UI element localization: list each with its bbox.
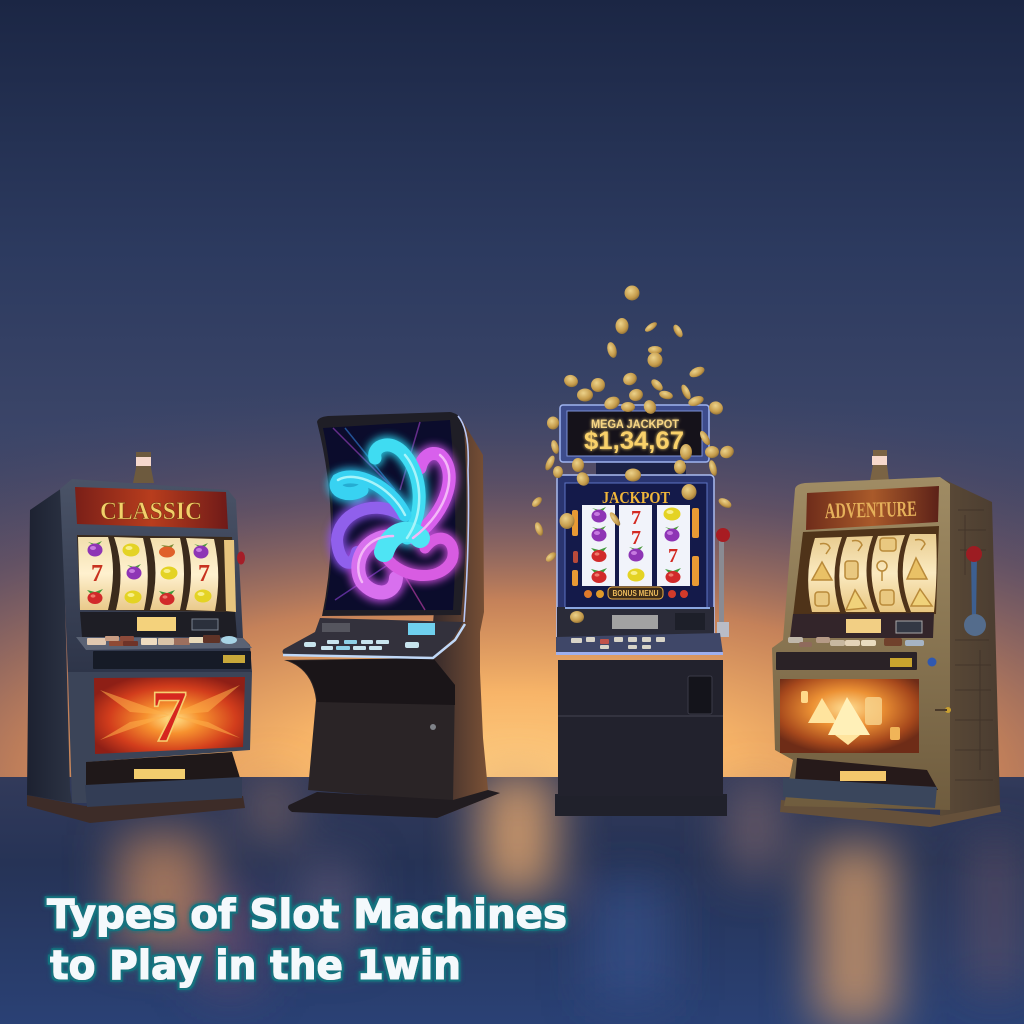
reel symbols: 7 [631,527,641,549]
lower cabinet [68,672,252,803]
payout tray [85,752,242,807]
control panel [282,618,463,657]
reels [582,505,690,586]
bright blue display [408,623,435,635]
base foot [288,790,500,818]
button deck [76,637,252,650]
marquee title: CLASSIC [100,498,202,525]
cabinet side [430,415,500,818]
upper frame [60,479,252,672]
lever [716,528,730,637]
buttons [788,637,924,647]
credit display [846,619,881,633]
reel symbols [591,507,681,583]
base [555,794,727,816]
neon edge light [458,416,468,622]
base plinth [27,795,245,823]
screen [323,420,455,610]
jackpot banner: JACKPOT [602,488,671,507]
side panel [27,488,72,803]
lower art panel [94,677,245,754]
title [47,892,567,989]
buttons [87,635,237,646]
side carvings [955,510,993,780]
base plinth [780,800,1001,827]
slot machine: video curved screen [282,412,500,818]
lower cabinet [558,660,723,796]
coin slot strip [93,651,251,669]
stand column [284,658,455,802]
reel symbols [87,541,212,605]
jackpot display [560,405,709,462]
buttons [304,640,419,650]
connector neck [596,462,686,476]
screen bezel [317,412,466,616]
marquee [75,487,228,529]
marquee [806,486,939,530]
reel window [77,535,236,612]
side symbol strips [572,508,699,586]
cabinet lock [430,724,436,730]
light bulb on top [870,450,889,481]
reel symbols: 7 [91,561,103,587]
stand upper shadow [290,658,455,705]
reel symbols: 7 [198,561,210,587]
screen rays [333,422,425,610]
door latch [935,707,951,713]
game face [565,483,707,611]
reel symbols [812,538,932,610]
reel symbols: 7 [668,545,678,567]
cash slot [688,676,712,714]
payout tray [783,758,938,808]
info panel [790,613,934,638]
credit display [137,617,176,631]
falling gold coins [530,286,736,623]
big seven: 7 [150,676,188,758]
reflective floor [0,777,1024,1024]
gold front frame [772,477,950,810]
side knob [237,552,245,564]
bonus plate [584,587,688,599]
reel window [793,526,939,616]
deck buttons [571,637,665,649]
pyramids artwork [801,691,900,745]
main cabinet [557,475,714,645]
dark display [322,623,350,632]
display heading: MEGA JACKPOT [591,417,680,431]
reels [808,534,937,612]
reel symbols: 7 [631,507,641,529]
slot machine: adventure [772,450,1001,827]
reels [78,537,236,612]
lower art panel [780,679,919,753]
background wall [0,0,1024,780]
title line 2: to Play in the 1win [50,943,461,989]
info panel [80,612,237,637]
cabinet seam [558,715,723,717]
textured side panel [940,480,1000,816]
marquee title: ADVENTURE [824,496,917,523]
panel glow edge [283,624,465,658]
title line 1: Types of Slot Machines [47,892,567,938]
neon swirl artwork [336,445,453,593]
blue gem [928,658,936,666]
bonus plate: BONUS MENU [612,589,659,598]
light bulb on top [133,452,154,483]
slot machine: mega jackpot [530,286,736,816]
strip with yellow plate [776,652,917,670]
control deck [556,607,723,655]
lever [964,546,986,636]
slot machine: classic [27,452,252,823]
burst rays [100,685,240,740]
jackpot amount: $1,34,67 [584,427,684,455]
orange backlight glow [0,380,1024,780]
floor reflections [118,775,1024,1024]
